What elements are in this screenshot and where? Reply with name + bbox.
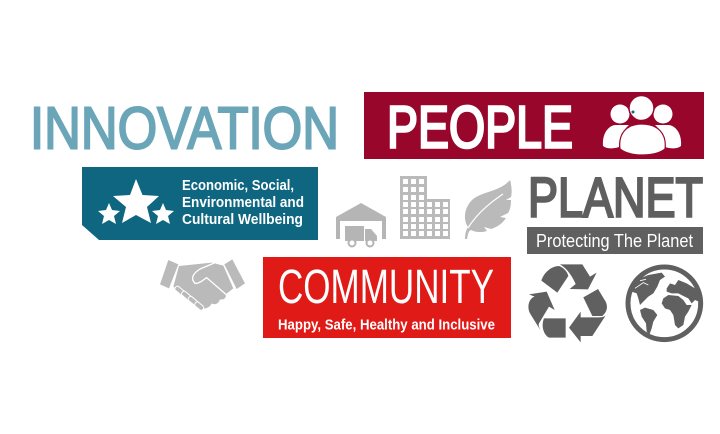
community subtitle: Happy, Safe, Healthy and Inclusive [278,318,495,334]
icon: warehouse with truck [336,203,386,246]
icon: leaf [465,180,512,239]
wellbeing text: Cultural Wellbeing [182,212,303,228]
panel: people [364,92,704,160]
people panel background [364,92,704,159]
heading: community: COMMUNITY [278,261,494,314]
icon: recycling arrows [528,264,607,342]
icon: three stars [98,179,174,224]
wellbeing text [182,178,304,228]
icon: globe [628,267,701,340]
banner text: Protecting The Planet [536,230,693,251]
icon: office building [400,176,450,239]
heading: innovation: INNOVATION [30,96,339,162]
icon: group of people [603,96,681,155]
icon: handshake [160,259,245,311]
panel: wellbeing [82,167,318,240]
panel: community [263,257,511,338]
wellbeing text: Environmental and [182,195,304,211]
panel: planet [527,166,703,254]
protecting the planet banner [527,227,703,254]
small teal dot on head [632,110,634,114]
wellbeing text: Economic, Social, [182,178,294,194]
community panel background [263,257,511,338]
wellbeing panel background [82,167,318,240]
heading: people: PEOPLE [387,94,573,160]
